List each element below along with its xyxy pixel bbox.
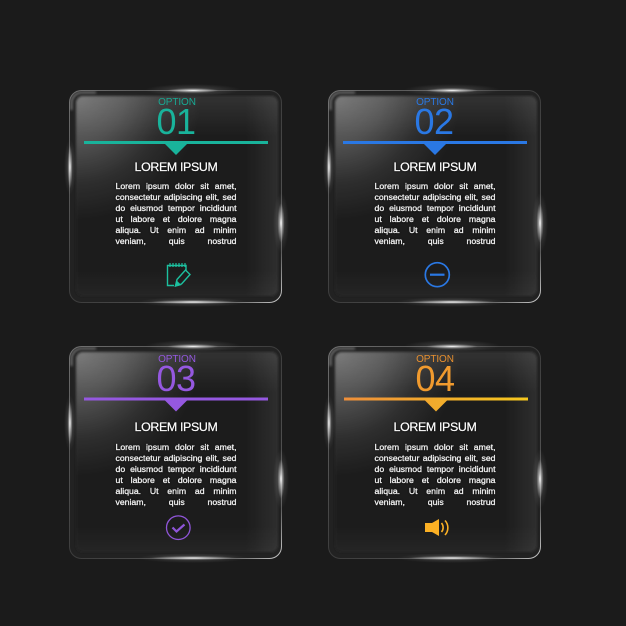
body text: Lorem ipsum dolor sit amet, [116,180,236,190]
body text: do eiusmod tempor incididunt [116,464,236,474]
body text: aliqua. Ut enim ad minim [374,486,496,496]
body text: consectetur adipiscing elit, sed [116,452,236,462]
option label: OPTION [158,97,196,108]
body text: ut labore et dolore magna [374,474,496,484]
body text: Lorem ipsum dolor sit amet, [374,442,496,452]
icon: notepad with pencil [166,263,191,287]
glass card [324,85,546,306]
glass card [65,85,288,306]
body text: veniam, quis nostrud [374,496,496,506]
icon: check in circle [166,515,191,540]
body text: veniam, quis nostrud [116,496,236,506]
panel: option 03 [65,341,288,562]
heading: LOREM IPSUM [135,160,217,174]
number: 03 [156,358,196,399]
body text [115,442,237,507]
number: 02 [414,101,454,142]
heading: LOREM IPSUM [394,420,476,434]
option label: OPTION [416,97,454,108]
body text: do eiusmod tempor incididunt [374,464,496,474]
icon: minus in circle [424,262,450,288]
heading: LOREM IPSUM [135,420,217,434]
body text [374,442,496,507]
glass card [65,341,288,562]
body text: ut labore et dolore magna [374,214,496,224]
number: 04 [415,358,455,399]
body text: aliqua. Ut enim ad minim [116,486,236,496]
body text: consectetur adipiscing elit, sed [374,452,496,462]
heading: LOREM IPSUM [394,160,476,174]
divider with pointer [84,398,268,412]
icon: speaker [425,519,449,536]
body text: veniam, quis nostrud [116,236,236,246]
option label: OPTION [416,354,454,365]
body text: ut labore et dolore magna [116,214,236,224]
body text: Lorem ipsum dolor sit amet, [374,180,496,190]
body text: veniam, quis nostrud [374,236,496,246]
body text: aliqua. Ut enim ad minim [374,224,496,234]
body text: Lorem ipsum dolor sit amet, [116,442,236,452]
divider with pointer [84,141,268,155]
panel: option 02 [324,85,546,306]
panel: option 01 [65,85,288,306]
divider with pointer [343,141,527,155]
number: 01 [156,101,196,142]
body text: aliqua. Ut enim ad minim [116,224,236,234]
body text: consectetur adipiscing elit, sed [116,192,236,202]
body text: do eiusmod tempor incididunt [374,202,496,212]
glass card [324,341,546,562]
panel: option 04 [324,341,546,562]
body text: ut labore et dolore magna [116,474,236,484]
option label: OPTION [158,354,196,365]
body text: consectetur adipiscing elit, sed [374,192,496,202]
body text: do eiusmod tempor incididunt [116,202,236,212]
body text [115,180,237,246]
divider with pointer [344,398,528,412]
body text [374,180,496,246]
